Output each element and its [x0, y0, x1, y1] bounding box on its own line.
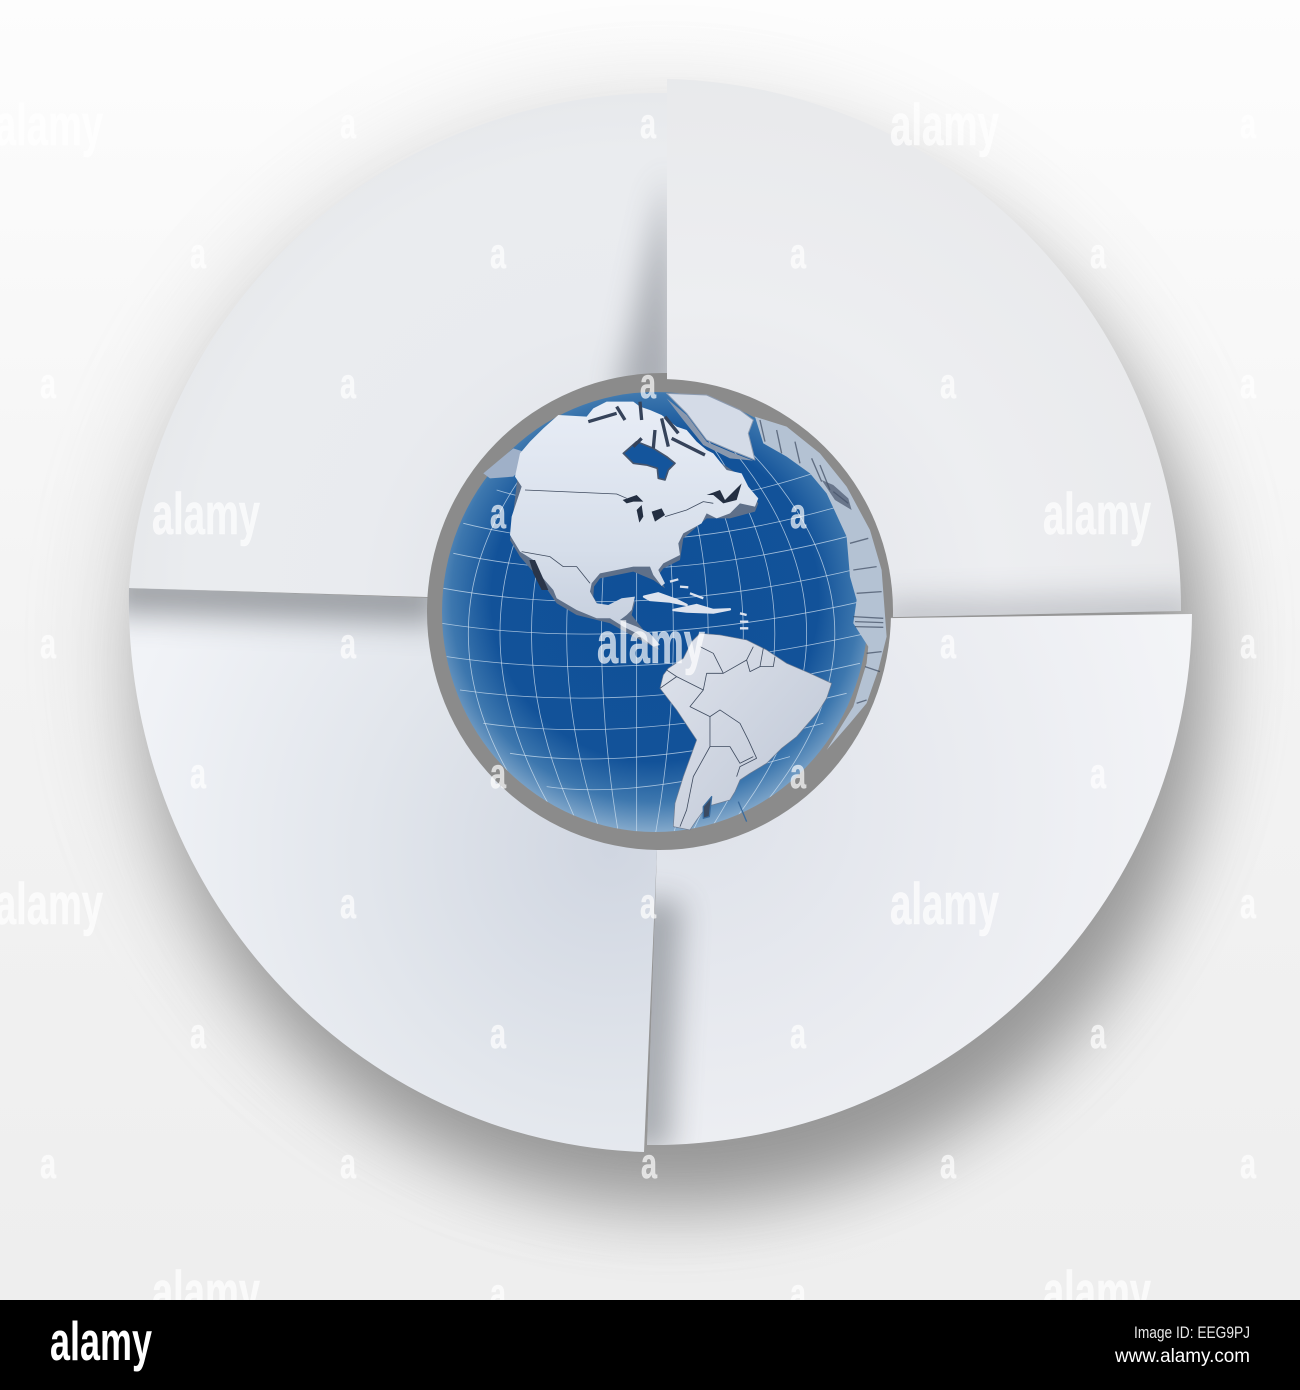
map features in crop coordinates — [442, 393, 887, 837]
small watermarks: a — [190, 1010, 207, 1058]
website: www.alamy.com — [1114, 1346, 1250, 1367]
small watermarks: a — [1090, 1010, 1107, 1058]
North America — [510, 402, 758, 647]
small watermarks: a — [340, 1140, 357, 1188]
large watermarks: alamy — [1043, 1260, 1151, 1325]
small watermarks: a — [1240, 100, 1257, 148]
Great Lakes and St Lawrence — [623, 483, 742, 523]
panel: top-right paper quadrant — [667, 79, 1181, 617]
North America extrusion — [510, 420, 758, 650]
shadow on top-left quadrant — [604, 188, 667, 380]
small watermarks: a — [1240, 880, 1257, 928]
small watermarks: a — [1240, 620, 1257, 668]
small watermarks: a — [1090, 750, 1107, 798]
small watermarks: a — [1240, 360, 1257, 408]
Caribbean islands — [644, 579, 748, 628]
small watermarks: a — [790, 490, 807, 538]
small watermarks: a — [40, 620, 57, 668]
small watermarks: a — [490, 750, 507, 798]
small watermarks: a — [640, 100, 657, 148]
small watermarks: a — [790, 230, 807, 278]
small watermarks: a — [190, 750, 207, 798]
North America borders — [522, 490, 713, 583]
large watermarks — [0, 93, 1151, 1325]
small watermarks: a — [640, 880, 657, 928]
image id: Image ID: EEG9PJ — [1134, 1323, 1250, 1342]
extruded eastern continents on the rim — [755, 417, 887, 750]
small watermarks: a — [640, 360, 657, 408]
small watermarks: a — [490, 230, 507, 278]
shadow on top-right quadrant — [880, 613, 1195, 620]
small watermarks: a — [490, 1010, 507, 1058]
Rio de la Plata and Patagonia shadows — [703, 797, 747, 822]
small watermarks: a — [1240, 1140, 1257, 1188]
Greenland shaded flank — [667, 398, 753, 461]
disc cast shadow — [155, 155, 1205, 1205]
panel: top-left paper quadrant — [129, 93, 667, 600]
globe socket ring — [427, 373, 899, 851]
large watermarks: alamy — [890, 872, 999, 937]
large watermarks: alamy — [152, 1260, 260, 1325]
disc ambient shadow — [110, 90, 1210, 1190]
shadow on bottom-right quadrant — [645, 900, 657, 1150]
small watermarks: a — [490, 490, 507, 538]
small watermarks: a — [340, 880, 357, 928]
Hudson Bay — [623, 442, 675, 480]
small watermarks: a — [340, 360, 357, 408]
large watermarks: alamy — [1043, 482, 1151, 547]
South America — [660, 633, 832, 830]
small watermarks: a — [790, 750, 807, 798]
small watermarks: a — [340, 100, 357, 148]
small watermarks: a — [940, 360, 957, 408]
ocean sphere — [442, 392, 868, 832]
large watermarks: alamy — [597, 611, 705, 676]
Alaska rim extrusion — [483, 448, 523, 478]
large watermarks: alamy — [890, 93, 999, 158]
small watermarks: a — [40, 360, 57, 408]
large watermarks: alamy — [152, 482, 260, 547]
Baja California gulf — [529, 560, 548, 590]
South America borders — [660, 647, 775, 827]
shadow on bottom-left quadrant — [110, 590, 440, 601]
graticule — [442, 437, 868, 837]
footer bar — [0, 1300, 1300, 1390]
Arctic channels — [588, 402, 705, 455]
small watermarks: a — [790, 1270, 807, 1318]
Greenland — [667, 393, 755, 460]
small watermarks: a — [190, 230, 207, 278]
small watermarks: a — [940, 620, 957, 668]
panel: bottom-left paper quadrant — [129, 588, 660, 1152]
panel: bottom-right paper quadrant — [647, 614, 1192, 1145]
small watermarks: a — [940, 1140, 957, 1188]
small watermarks: a — [490, 1270, 507, 1318]
footer logo: alamy — [50, 1310, 152, 1372]
small watermarks: a — [40, 1140, 57, 1188]
small watermarks: a — [1090, 230, 1107, 278]
small watermarks: a — [790, 1010, 807, 1058]
small watermarks: a — [340, 620, 357, 668]
small watermarks: a — [641, 1140, 658, 1188]
globe — [442, 392, 887, 837]
